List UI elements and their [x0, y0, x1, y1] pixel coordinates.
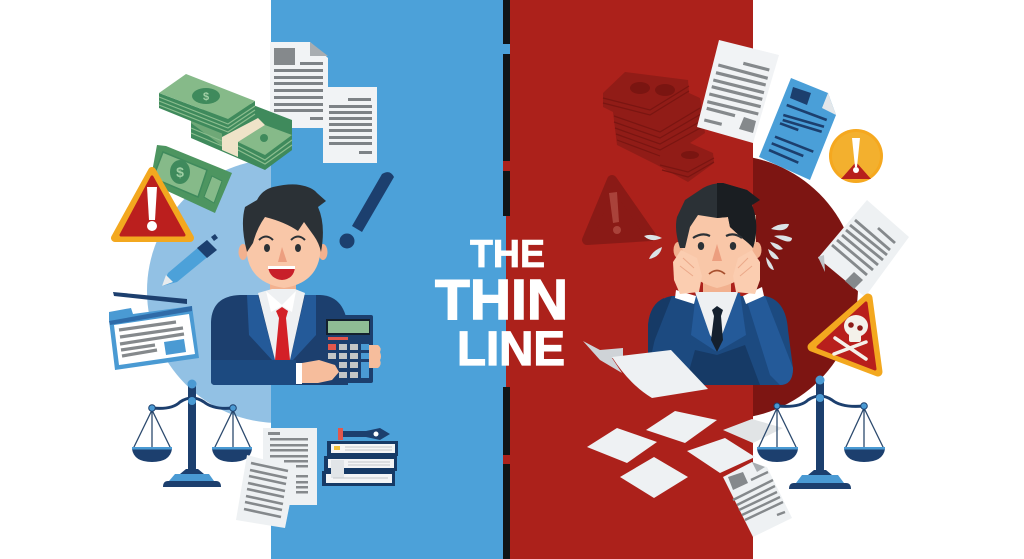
title	[435, 233, 568, 376]
icon: yellow alert badge	[829, 129, 883, 183]
dark red semicircle	[753, 158, 858, 416]
icon: pen	[162, 234, 218, 286]
suit	[648, 296, 793, 385]
icon: books and pen	[322, 428, 398, 486]
hair	[243, 184, 326, 252]
icon: documents bottom left	[236, 428, 317, 528]
face	[682, 215, 756, 288]
dashed dividing line	[503, 0, 510, 559]
infographic: the thin line	[109, 0, 909, 559]
title: THIN	[435, 268, 568, 332]
character: confident man with calculator	[211, 184, 381, 385]
hands on cheeks	[673, 250, 702, 294]
icon: single banknote	[150, 145, 232, 213]
icon: money stacks	[159, 74, 292, 170]
icon: faded warning triangle	[587, 180, 651, 240]
icon: faded money stacks	[603, 72, 714, 182]
icon: document bottom right	[723, 462, 792, 537]
icon: documents top left	[270, 42, 377, 163]
mouth	[268, 267, 295, 280]
calculator	[323, 315, 373, 383]
panel: red side	[506, 0, 753, 559]
icon: exclamation mark	[340, 172, 394, 248]
icon: skull warning triangle	[812, 298, 878, 372]
hair	[676, 183, 760, 248]
title: THE	[470, 233, 545, 276]
icon: scales of justice right	[757, 376, 885, 489]
icon: tilted document right	[818, 200, 909, 297]
icon: folder	[109, 292, 199, 370]
icon: warning triangle left	[115, 171, 190, 238]
cuffs	[675, 290, 696, 304]
ears	[674, 242, 682, 258]
icon: single banknote: $	[176, 164, 184, 180]
icon: blue document	[759, 78, 836, 180]
panel: blue side	[271, 0, 506, 559]
hands	[369, 345, 381, 368]
sleeves	[648, 296, 672, 352]
icon: money stacks: $	[203, 91, 209, 103]
icon: scales of justice left	[132, 380, 252, 487]
ears	[238, 244, 248, 260]
icon: falling papers	[583, 341, 783, 498]
title: LINE	[457, 323, 565, 376]
icon: document top right	[697, 40, 779, 143]
face	[247, 215, 320, 288]
eyes and brows	[693, 234, 742, 238]
light blue semicircle	[147, 162, 271, 423]
suit	[211, 295, 348, 385]
icon: sweat drops	[644, 224, 792, 270]
character: worried man	[648, 183, 793, 385]
brows and eyes	[259, 236, 305, 240]
